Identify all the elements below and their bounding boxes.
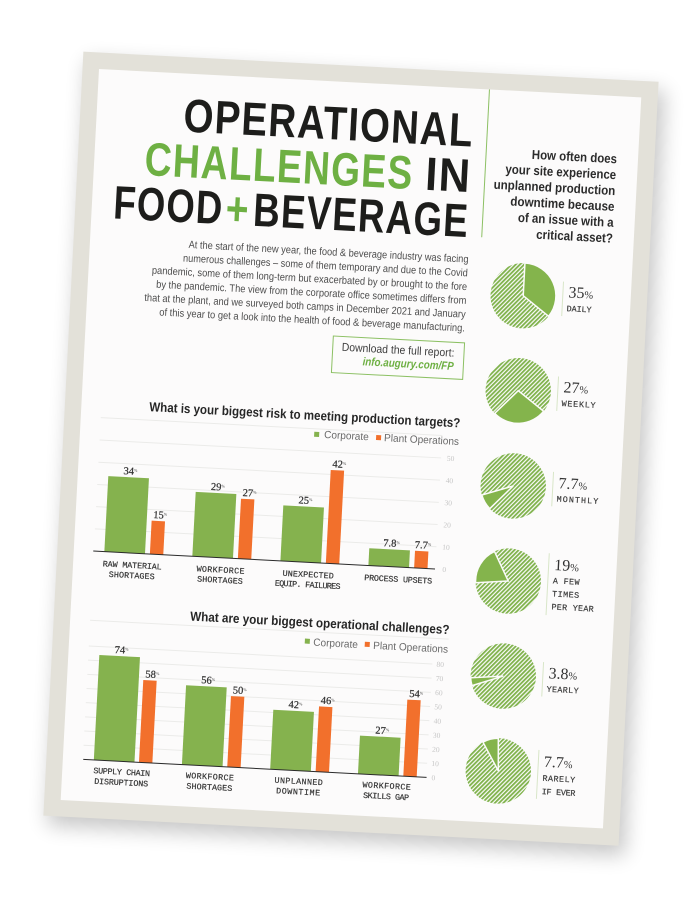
chart 2 bars: supply chain disruptions	[92, 644, 161, 790]
pie: weekly 27%	[484, 356, 598, 427]
chart 2 bars: unplanned downtime	[269, 693, 336, 799]
pie: weekly 27%: 27%	[563, 379, 589, 398]
pie: a few times per year 19%: TIMES	[552, 589, 579, 601]
chart 2 gridlines and axis numbers: 20	[432, 745, 440, 754]
chart 1 bars: workforce shortages: SHORTAGES	[197, 575, 243, 587]
intro paragraph: of this year to get a look into the health of food & beverage manufacturing.	[159, 306, 465, 334]
chart 2 gridlines and axis numbers	[83, 620, 449, 783]
chart 1 bars: workforce shortages: 27	[242, 488, 253, 500]
chart 1 legend	[314, 428, 459, 448]
pie: daily 35%: 35%	[568, 284, 594, 303]
chart 2 bars: workforce shortages: %	[243, 687, 247, 692]
chart 1 gridlines and axis numbers: 40	[445, 476, 454, 485]
pie: a few times per year 19%: PER YEAR	[551, 602, 594, 615]
pie: yearly 3.8%: YEARLY	[546, 685, 579, 696]
chart 1 gridlines and axis numbers: 50	[447, 454, 455, 463]
title: CHALLENGES	[143, 132, 415, 199]
chart 1: production target risks	[92, 397, 461, 598]
intro paragraph: by the pandemic. The view from the corporate office sometimes differs from	[156, 279, 467, 307]
pie: monthly 7.7%	[479, 452, 601, 523]
chart 1 baseline	[93, 551, 435, 569]
chart 2 bars: supply chain disruptions: SUPPLY CHAIN	[93, 766, 150, 779]
chart 1 gridlines and axis numbers: 10	[442, 543, 450, 552]
chart 1 bars: workforce shortages: %	[253, 490, 257, 495]
intro paragraph: pandemic, some of them long-term but exacerbated by or brought to the fore	[152, 265, 468, 293]
download callout	[331, 336, 465, 379]
chart 2 bars: workforce shortages: %	[212, 677, 216, 682]
chart 2 bars: unplanned downtime: 42	[288, 700, 299, 711]
pie: yearly 3.8%: 3.8%	[548, 665, 578, 684]
chart 1 heading: What is your biggest risk to meeting production targets?	[149, 399, 461, 430]
chart 1 bars: unexpected equipment failures: 25	[298, 495, 309, 507]
chart 2 gridlines and axis numbers: 0	[431, 773, 436, 782]
chart 2 bars: workforce shortages: 56	[201, 675, 212, 687]
chart 2 bars: supply chain disruptions: 58	[145, 669, 156, 681]
downtime question: of an issue with a	[518, 210, 615, 230]
pie: monthly 7.7%: MONTHLY	[556, 495, 598, 507]
chart 1 bars: process upsets: %	[428, 542, 432, 547]
chart 1 bars: unexpected equipment failures: %	[343, 461, 347, 466]
chart 2 bars: workforce skills gap: SKILLS GAP	[363, 791, 409, 803]
pie: rarely if ever 7.7%: 7.7%	[543, 754, 573, 772]
chart 1 gridlines and axis numbers: 30	[444, 498, 453, 508]
chart 2 baseline	[83, 759, 427, 777]
pie: a few times per year 19%	[474, 547, 597, 618]
chart 1 bars: raw material shortages: 15	[153, 510, 164, 521]
chart 2 bars: workforce skills gap: 54	[409, 689, 420, 700]
pie: rarely if ever 7.7%: RARELY	[542, 774, 575, 785]
chart 2 bars: unplanned downtime: %	[299, 701, 303, 706]
chart 2: operational challenges	[81, 603, 450, 805]
chart 2 bars: workforce shortages	[181, 674, 248, 794]
chart 1 bars: process upsets: 7.7	[414, 540, 428, 552]
chart 2 bars: workforce skills gap	[357, 686, 424, 804]
chart 1 bars: unexpected equipment failures: EQUIP. FAILURES	[275, 579, 341, 592]
chart 1 bars: workforce shortages	[191, 481, 258, 587]
chart 1 bars: workforce shortages: %	[221, 483, 226, 489]
chart 1 bars: process upsets	[364, 537, 434, 587]
chart 1 bars: raw material shortages	[102, 465, 170, 583]
chart 2 legend	[304, 636, 448, 656]
chart 2 bars: workforce skills gap: %	[420, 690, 424, 696]
chart 2 bars: supply chain disruptions: %	[125, 647, 129, 652]
chart 2 heading: What are your biggest operational challenges?	[190, 609, 450, 637]
chart 2 bars: supply chain disruptions: %	[156, 671, 160, 676]
chart 2 gridlines and axis numbers: 70	[436, 674, 444, 683]
chart 1 bars: process upsets: 7.8	[383, 538, 397, 550]
pie: weekly 27%: WEEKLY	[561, 399, 596, 411]
poster shadow	[47, 60, 665, 856]
chart 1 bars: unexpected equipment failures: %	[309, 497, 313, 502]
title: IN	[424, 147, 473, 202]
chart 2 bars: workforce shortages: WORKFORCE	[186, 771, 234, 784]
pie: a few times per year 19%: 19%	[554, 557, 580, 575]
chart 1 bars: unexpected equipment failures: UNEXPECTED	[282, 569, 334, 581]
chart 1 bars: process upsets: %	[396, 540, 401, 545]
chart 1 bars: raw material shortages: SHORTAGES	[108, 570, 155, 582]
chart 2 bars: unplanned downtime: 46	[321, 696, 332, 707]
download callout: Download the full report:	[341, 342, 455, 360]
chart 2 gridlines and axis numbers: 30	[433, 731, 441, 740]
downtime question	[491, 145, 618, 246]
chart 1 legend: Corporate	[324, 429, 369, 443]
chart 1 bars: raw material shortages: %	[134, 468, 138, 473]
chart 1 bars: raw material shortages: RAW MATERIAL	[103, 559, 162, 572]
chart 2 gridlines and axis numbers: 50	[434, 702, 442, 712]
chart 2 bars: workforce skills gap: WORKFORCE	[362, 780, 411, 793]
pie: daily 35%: DAILY	[566, 304, 592, 315]
chart 2 bars: unplanned downtime: DOWNTIME	[276, 786, 320, 799]
chart 2 bars: supply chain disruptions: 74	[114, 645, 125, 657]
poster paper	[61, 69, 641, 828]
chart 2 legend: Plant Operations	[373, 640, 448, 656]
chart 2 bars: workforce shortages: 50	[232, 685, 243, 697]
downtime question: critical asset?	[536, 227, 613, 246]
chart 1 bars: unexpected equipment failures: 42	[332, 459, 343, 471]
chart 2 gridlines and axis numbers: 10	[431, 759, 439, 768]
downtime question: unplanned production	[493, 177, 616, 198]
title	[112, 85, 475, 247]
chart 1 bars: raw material shortages: 34	[123, 466, 134, 478]
poster frame	[43, 52, 659, 846]
download callout: info.augury.com/FP	[362, 356, 454, 373]
chart 1 bars: workforce shortages: WORKFORCE	[196, 564, 245, 577]
chart 2 gridlines and axis numbers: 60	[435, 688, 443, 697]
chart 1 gridlines and axis numbers: 20	[443, 520, 451, 530]
green column divider	[482, 89, 489, 237]
chart 1 bars: process upsets: PROCESS UPSETS	[364, 573, 432, 587]
chart 1 gridlines and axis numbers	[94, 418, 456, 574]
chart 1 gridlines and axis numbers: 0	[442, 565, 447, 574]
title: BEVERAGE	[252, 183, 470, 247]
intro paragraph: numerous challenges – some of them temporary and due to the Covid	[183, 252, 468, 279]
chart 1 bars: unexpected equipment failures	[275, 457, 347, 592]
chart 2 bars: workforce skills gap: 27	[375, 726, 386, 737]
poster	[43, 52, 665, 856]
downtime question: your site experience	[505, 161, 617, 182]
intro paragraph: At the start of the new year, the food & beverage industry was facing	[188, 239, 469, 266]
pie: rarely if ever 7.7%: IF EVER	[541, 787, 576, 799]
pie: a few times per year 19%: A FEW	[553, 576, 581, 588]
chart 2 gridlines and axis numbers: 40	[433, 716, 442, 726]
pie: yearly 3.8%	[469, 642, 581, 713]
chart 1 bars: raw material shortages: %	[164, 512, 168, 517]
title: +	[225, 181, 251, 236]
chart 2 bars: unplanned downtime: %	[331, 697, 336, 702]
downtime question: How often does	[532, 147, 617, 166]
pie: rarely if ever 7.7%	[464, 737, 578, 808]
pie: daily 35%	[489, 261, 595, 332]
chart 2 bars: unplanned downtime: UNPLANNED	[274, 776, 323, 788]
intro paragraph	[143, 237, 469, 335]
chart 1 legend: Plant Operations	[384, 432, 459, 448]
title: FOOD	[112, 175, 225, 234]
intro paragraph: that at the plant, and we surveyed both camps in December 2021 and January	[144, 292, 467, 321]
chart 2 bars: workforce shortages: SHORTAGES	[186, 782, 233, 794]
pie: monthly 7.7%: 7.7%	[558, 475, 588, 494]
chart 2 gridlines and axis numbers: 80	[436, 660, 445, 669]
chart 2 bars: workforce skills gap: %	[386, 727, 390, 732]
chart 2 legend: Corporate	[313, 637, 358, 651]
downtime question: downtime because	[510, 194, 615, 214]
chart 1 bars: workforce shortages: 29	[211, 482, 222, 493]
chart 2 bars: supply chain disruptions: DISRUPTIONS	[94, 777, 148, 790]
title: OPERATIONAL	[182, 89, 475, 157]
